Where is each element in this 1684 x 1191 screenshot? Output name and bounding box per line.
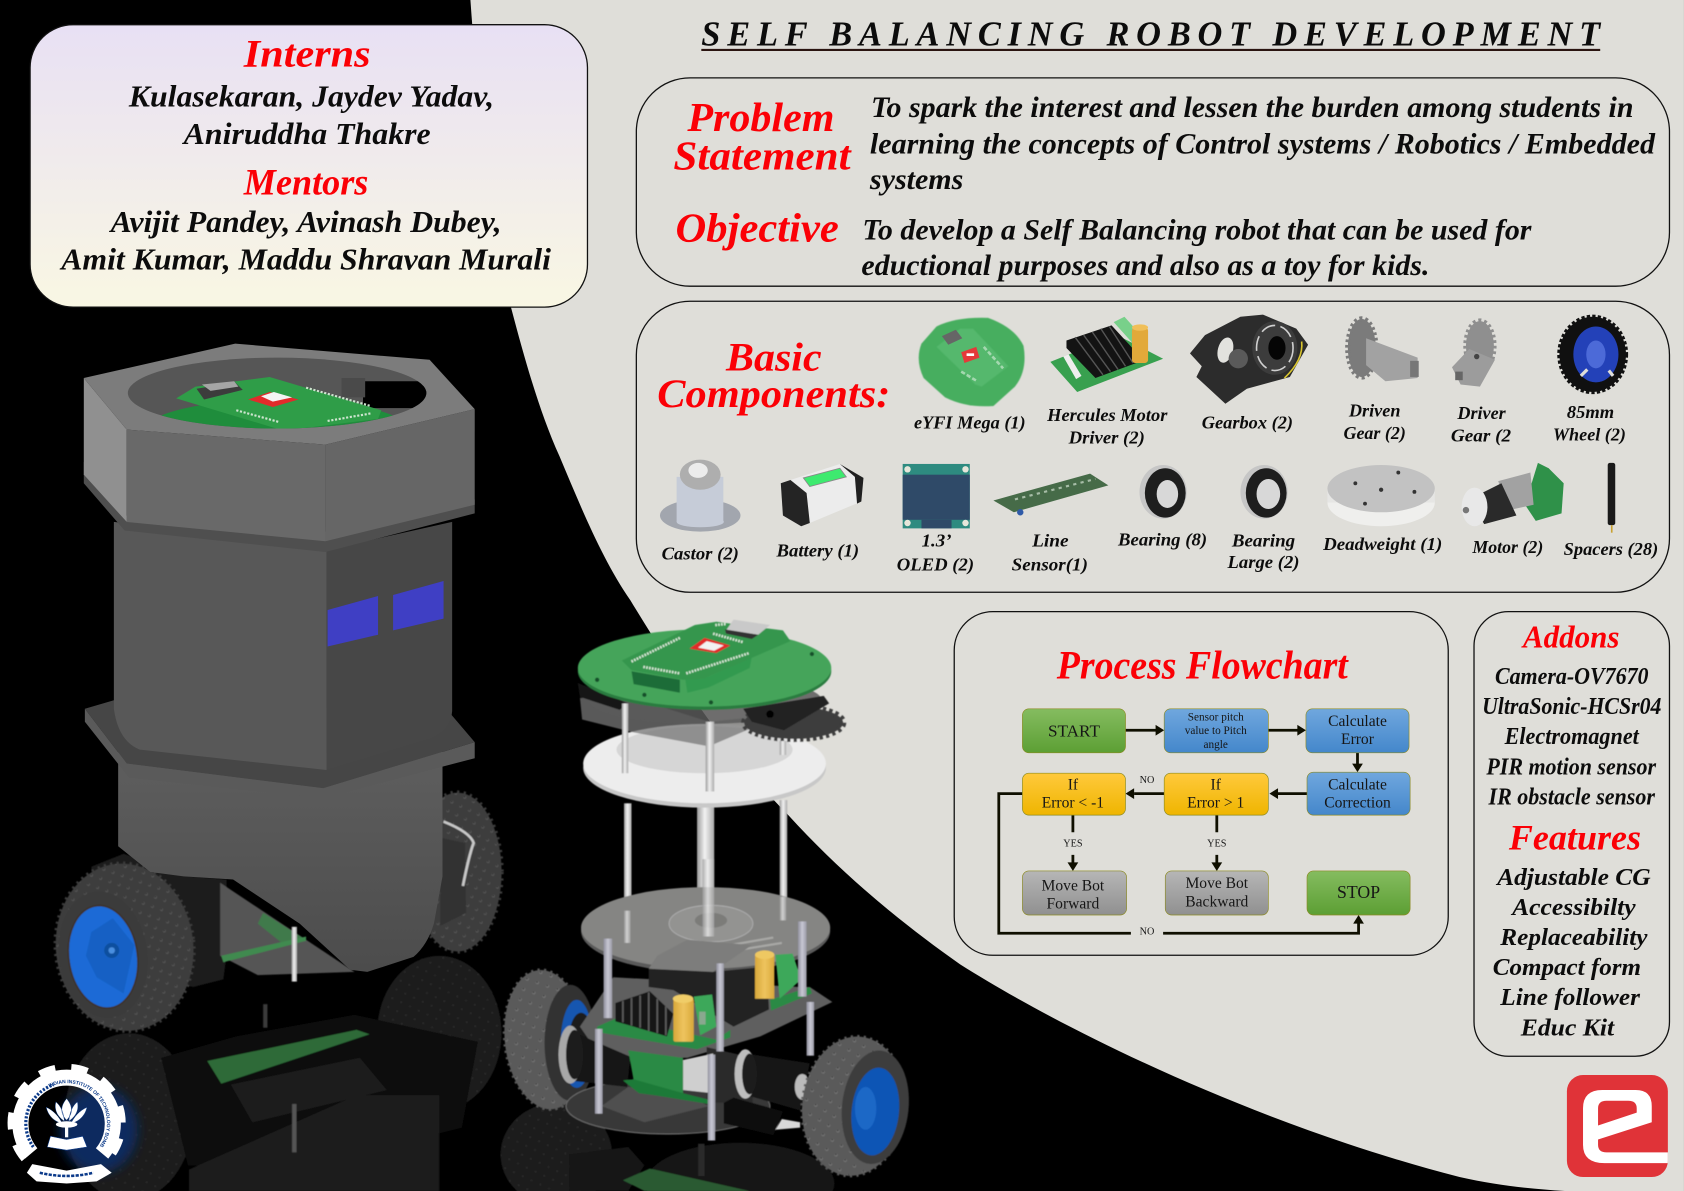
objective text: To develop a Self Balancing robot that can be used for xyxy=(862,214,1532,246)
microcontroller shield xyxy=(622,620,790,693)
icon: IIT Bombay logo: INDIAN INSTITUTE OF TECHNOLOGY BOMBAY xyxy=(48,1080,110,1148)
flow step: calculate correction: Correction xyxy=(1324,795,1391,812)
flange xyxy=(85,700,475,798)
body left face xyxy=(114,522,327,770)
flow labels: YES xyxy=(1207,838,1227,849)
problem statement text xyxy=(869,92,1656,196)
panel: process flowchart xyxy=(954,612,1448,955)
component: eYFI Mega xyxy=(914,318,1026,433)
lower housing xyxy=(118,752,442,972)
heading: objective: Objective xyxy=(676,206,839,251)
panel: basic components xyxy=(636,301,1669,592)
flow step: move backward: Backward xyxy=(1185,893,1249,910)
icon: front wheel xyxy=(47,857,202,1038)
component: line sensor: Line xyxy=(1031,531,1069,551)
motor left xyxy=(558,1026,630,1087)
shaft and centre block xyxy=(601,1047,753,1122)
component: deadweight xyxy=(1322,465,1442,554)
flow step: calculate error: Calculate xyxy=(1328,713,1387,730)
icon: rear wheel xyxy=(413,793,502,952)
component: spacer xyxy=(1564,463,1658,559)
lower spacers xyxy=(595,921,814,1141)
flow step: move forward: Move Bot xyxy=(1042,877,1105,894)
component: castor xyxy=(660,460,741,564)
component: line sensor xyxy=(993,474,1108,574)
component: bearing large: Bearing xyxy=(1231,531,1295,551)
component: bearing large xyxy=(1226,465,1299,572)
LED panel 1 xyxy=(328,596,378,647)
bottom plate xyxy=(566,1078,770,1134)
component: OLED: 1.3’ xyxy=(921,531,952,551)
features list: Line follower xyxy=(1499,984,1640,1011)
component: battery xyxy=(775,464,863,560)
addons list: PIR motion sensor xyxy=(1485,753,1656,780)
dark sensor box xyxy=(649,967,769,1027)
component: gearbox xyxy=(1190,315,1308,433)
panel: addons and features xyxy=(1474,612,1669,1056)
flow step: move backward xyxy=(1165,871,1268,915)
front motor driver xyxy=(597,991,730,1049)
component: 85mm wheel xyxy=(1553,317,1626,444)
features list xyxy=(1493,864,1651,1041)
intern names xyxy=(128,78,494,151)
heading: basic components: Basic xyxy=(725,336,822,380)
right wheel xyxy=(795,1031,914,1181)
features list: Accessibilty xyxy=(1510,894,1637,921)
mentor names xyxy=(59,204,551,277)
component: eYFI Mega: eYFI Mega (1) xyxy=(914,413,1026,433)
flow labels xyxy=(1063,775,1227,937)
component: castor: Castor (2) xyxy=(662,544,739,564)
component: deadweight: Deadweight (1) xyxy=(1322,534,1442,554)
flow step: start: START xyxy=(1048,722,1100,741)
lower stage xyxy=(558,921,814,1141)
mentor names: Amit Kumar, Maddu Shravan Murali xyxy=(59,242,551,277)
title: SELF BALANCING ROBOT DEVELOPMENT xyxy=(701,16,1602,54)
component: driven gear: Gear (2) xyxy=(1344,423,1406,443)
heading: addons: Addons xyxy=(1521,619,1620,655)
LED panel 2 xyxy=(393,581,444,630)
translucent plate overlap xyxy=(649,940,752,972)
mentor names: Avijit Pandey, Avinash Dubey, xyxy=(109,204,502,239)
grey translucent plate xyxy=(581,859,830,973)
flow decision: error less than -1 xyxy=(1022,773,1126,815)
component: motor xyxy=(1462,463,1564,557)
component: driver gear: Gear (2 xyxy=(1451,425,1511,445)
component: 85mm wheel: 85mm xyxy=(1567,402,1614,422)
features list: Replaceability xyxy=(1499,924,1649,951)
heading: features: Features xyxy=(1508,817,1641,857)
panel: interns and mentors xyxy=(30,25,587,307)
component: spacer: Spacers (28) xyxy=(1564,539,1658,559)
heading: basic components xyxy=(657,336,890,416)
flow decision: error less than -1: Error < -1 xyxy=(1042,795,1104,812)
component: motor: Motor (2) xyxy=(1471,537,1543,557)
component: Hercules motor driver xyxy=(1046,317,1169,448)
intern names: Aniruddha Thakre xyxy=(182,116,431,151)
component: driver gear: Driver xyxy=(1456,403,1507,423)
heading: problem statement xyxy=(673,95,852,179)
flow step: move forward xyxy=(1022,871,1127,915)
addons list: Camera-OV7670 xyxy=(1495,663,1649,690)
component: driven gear: Driven xyxy=(1348,401,1400,421)
component: driver gear xyxy=(1451,321,1511,445)
component: bearing large: Large (2) xyxy=(1226,552,1299,572)
flow step: stop xyxy=(1307,871,1410,915)
upper rods xyxy=(624,800,787,961)
component: gearbox: Gearbox (2) xyxy=(1202,413,1293,433)
heading: mentors: Mentors xyxy=(243,161,368,202)
component: bearing: Bearing (8) xyxy=(1117,530,1207,550)
large enclosed robot xyxy=(47,344,502,1038)
flow step: calculate error xyxy=(1306,709,1409,753)
features list: Educ Kit xyxy=(1520,1014,1615,1041)
addons list: UltraSonic-HCSr04 xyxy=(1482,693,1661,720)
problem statement text: systems xyxy=(869,164,963,196)
component: OLED: OLED (2) xyxy=(897,554,974,574)
component: Hercules motor driver: Driver (2) xyxy=(1068,428,1145,448)
features list: Adjustable CG xyxy=(1495,864,1651,891)
heading: interns: Interns xyxy=(243,34,371,76)
component: OLED xyxy=(897,464,974,574)
component: battery: Battery (1) xyxy=(775,540,859,560)
flow decision: error greater than 1: If xyxy=(1211,776,1222,793)
flow decision: error greater than 1 xyxy=(1164,773,1268,815)
flowchart connectors xyxy=(999,730,1359,933)
flow decision: error less than -1: If xyxy=(1068,776,1079,793)
objective text xyxy=(861,214,1532,282)
rear driver board xyxy=(755,950,812,1011)
top cap xyxy=(84,344,475,552)
motor bracket xyxy=(623,1050,709,1104)
flow labels: NO xyxy=(1140,926,1154,937)
addons list: Electromagnet xyxy=(1504,723,1640,750)
flow step: stop: STOP xyxy=(1337,882,1380,902)
body right face xyxy=(327,522,452,770)
flow labels: NO xyxy=(1140,775,1154,786)
addons list xyxy=(1482,663,1661,810)
flow step: sensor pitch: value to Pitch xyxy=(1185,725,1247,737)
rear chassis plate xyxy=(580,977,832,1058)
flow step: start xyxy=(1022,709,1126,753)
component: line sensor: Sensor(1) xyxy=(1012,554,1088,574)
reflection xyxy=(500,1103,834,1191)
component: bearing xyxy=(1117,465,1207,550)
heading: problem statement: Problem xyxy=(686,95,834,140)
objective text: eductional purposes and also as a toy for kids. xyxy=(861,250,1429,282)
icon: e-Yantra logo xyxy=(1567,1075,1671,1177)
plate spacers xyxy=(622,703,786,791)
under-chassis assembly xyxy=(91,854,354,987)
component: 85mm wheel: Wheel (2) xyxy=(1553,424,1626,444)
flow step: move forward: Forward xyxy=(1047,896,1099,913)
component: Hercules motor driver: Hercules Motor xyxy=(1046,405,1169,425)
features list: Compact form xyxy=(1493,954,1641,981)
reflection of large robot xyxy=(64,956,502,1191)
green PCB disc xyxy=(578,620,831,710)
flow labels: YES xyxy=(1063,838,1083,849)
flow step: calculate correction: Calculate xyxy=(1328,776,1387,793)
exploded robot xyxy=(498,620,914,1191)
white acrylic plate xyxy=(583,724,826,808)
left wheel xyxy=(498,966,596,1113)
problem statement text: learning the concepts of Control systems / Robotics / Embedded xyxy=(870,129,1656,161)
flow step: calculate error: Error xyxy=(1341,731,1375,748)
motor right xyxy=(724,1049,810,1135)
icon: IIT Bombay logo xyxy=(8,1064,144,1184)
heading: problem statement: Statement xyxy=(673,134,852,179)
problem statement text: To spark the interest and lessen the burden among students in xyxy=(871,92,1633,124)
flow decision: error greater than 1: Error > 1 xyxy=(1187,795,1244,812)
addons list: IR obstacle sensor xyxy=(1488,783,1655,810)
flow step: sensor pitch xyxy=(1164,709,1268,753)
heading: basic components: Components: xyxy=(657,372,890,416)
intern names: Kulasekaran, Jaydev Yadav, xyxy=(128,78,494,113)
gearbox layer xyxy=(578,677,843,746)
component: driven gear xyxy=(1344,319,1419,443)
heading: process flowchart: Process Flowchart xyxy=(1056,644,1350,688)
flowchart arrowheads xyxy=(1068,725,1364,924)
panel: problem statement and objective xyxy=(636,78,1669,286)
flow step: calculate correction xyxy=(1307,772,1410,815)
flow step: sensor pitch: angle xyxy=(1204,739,1228,751)
flow step: sensor pitch: Sensor pitch xyxy=(1188,712,1244,724)
flow step: move backward: Move Bot xyxy=(1185,875,1249,892)
